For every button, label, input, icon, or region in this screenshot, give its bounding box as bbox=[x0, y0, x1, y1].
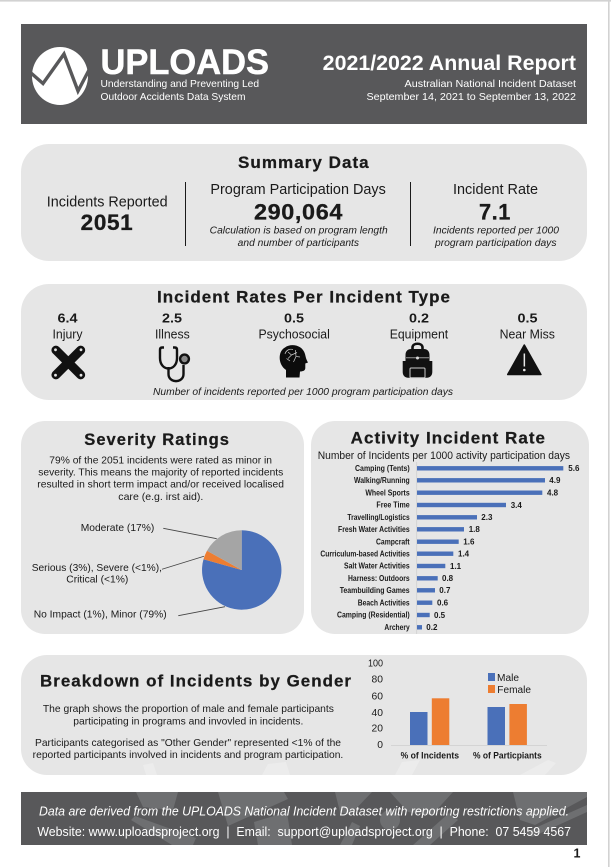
text: gender description: The graph shows the proportion of male and female participants bbox=[43, 704, 334, 715]
bar chart: activity rates: Fresh Water Activities bbox=[338, 525, 410, 534]
stat: equipment: 0.2 bbox=[409, 311, 429, 326]
icon: stethoscope bbox=[160, 348, 189, 381]
chart category labels bbox=[401, 751, 542, 761]
stat: program participation days: and number of participants bbox=[238, 238, 359, 249]
pie label: serious, severe, critical: Critical (<1%) bbox=[66, 575, 128, 586]
pie label: no impact, minor: No Impact (1%), Minor (79%) bbox=[34, 610, 167, 621]
bar chart: activity rates: 0.6 bbox=[437, 598, 449, 608]
chart y axis: 60 bbox=[372, 691, 383, 702]
chart y axis: 40 bbox=[372, 708, 383, 719]
stat: incidents reported: Incidents Reported bbox=[47, 195, 168, 211]
report title bbox=[323, 52, 576, 103]
bar chart: activity rates: Curriculum-based Activities bbox=[320, 549, 410, 558]
text: severity description: 79% of the 2051 incidents were rated as minor in bbox=[49, 455, 272, 466]
logo wordmark: Understanding and Preventing Led bbox=[100, 79, 259, 90]
text: gender description bbox=[33, 704, 343, 761]
text: severity description: care (e.g. irst aid). bbox=[118, 492, 203, 503]
panel: breakdown of incidents by gender bbox=[21, 655, 587, 775]
bar chart: activity rates: 4.9 bbox=[549, 476, 561, 485]
chart legend: Female bbox=[497, 685, 531, 696]
chart y axis bbox=[368, 659, 383, 751]
stat: psychosocial: 0.5 bbox=[284, 311, 304, 326]
chart category labels: % of Particpiants bbox=[473, 751, 542, 761]
bar chart: activity rates: Beach Activities bbox=[358, 598, 410, 607]
header banner bbox=[21, 24, 587, 124]
text: gender description: participating in programs and invovled in incidents. bbox=[73, 717, 303, 728]
chart bars bbox=[410, 698, 527, 745]
caption: incident rates: Number of incidents reported per 1000 program participation days bbox=[153, 387, 453, 398]
bar chart: activity rates: Teambuilding Games bbox=[340, 586, 410, 595]
stat: injury: Injury bbox=[52, 327, 83, 341]
icon: backpack bbox=[403, 344, 432, 378]
stat: program participation days: Program Participation Days bbox=[210, 182, 386, 198]
logo wordmark bbox=[100, 43, 269, 103]
chart legend: Male bbox=[497, 673, 519, 684]
panel: incident rates per incident type bbox=[21, 284, 587, 400]
icon: warning triangle bbox=[508, 345, 541, 374]
pie chart: severity bbox=[32, 523, 281, 621]
pie label: moderate bbox=[81, 523, 217, 539]
report title: 2021/2022 Annual Report bbox=[323, 52, 576, 75]
bar chart: activity rates: 0.2 bbox=[426, 623, 438, 632]
bar chart: activity rates: Walking/Running bbox=[354, 476, 410, 485]
stat: illness: 2.5 bbox=[162, 311, 182, 326]
column chart: gender bbox=[368, 659, 547, 761]
chart category labels: % of Incidents bbox=[401, 751, 459, 761]
bar chart: activity rates: 4.8 bbox=[547, 488, 559, 498]
bar chart: activity rates bbox=[320, 462, 580, 634]
chart y axis: 0 bbox=[377, 740, 383, 751]
pie label: no impact, minor bbox=[34, 607, 225, 621]
stat: incidents reported: 2051 bbox=[81, 210, 133, 235]
bar chart: activity rates: Archery bbox=[384, 623, 410, 632]
bar chart: activity rates: 5.6 bbox=[568, 464, 580, 473]
bar chart: activity rates: 2.3 bbox=[481, 513, 493, 522]
heading: activity incident rate: Activity Incident Rate bbox=[351, 429, 546, 447]
bar chart: activity rates: Harness: Outdoors bbox=[348, 574, 410, 583]
pie label: moderate: Moderate (17%) bbox=[81, 523, 154, 534]
pie label: serious, severe, critical: Serious (3%), Severe (<1%), bbox=[32, 563, 162, 574]
stat: psychosocial bbox=[258, 311, 330, 341]
stat: equipment: Equipment bbox=[390, 327, 449, 341]
chart y axis: 20 bbox=[372, 724, 383, 735]
stat: incidents reported bbox=[47, 195, 168, 235]
bar chart: activity rates: Camping (Tents) bbox=[355, 464, 410, 473]
bar chart: activity rates: 1.4 bbox=[458, 550, 470, 558]
stat: illness bbox=[155, 311, 190, 341]
heading: gender: Breakdown of Incidents by Gender bbox=[40, 673, 352, 691]
bar chart: activity rates: Travelling/Logistics bbox=[347, 513, 410, 522]
page number: 1 bbox=[574, 847, 580, 861]
bar chart: activity rates: 0.8 bbox=[442, 574, 454, 583]
bar chart: activity rates: 0.5 bbox=[434, 611, 446, 620]
bar chart: activity rates: 1.6 bbox=[463, 538, 475, 546]
stat: near miss bbox=[500, 311, 555, 341]
stat: near miss: 0.5 bbox=[518, 311, 538, 326]
stat: program participation days: 290,064 bbox=[254, 199, 343, 224]
stat: incident rate: Incidents reported per 1000 bbox=[433, 225, 559, 236]
pie label: serious, severe, critical bbox=[32, 556, 204, 586]
panel: summary data bbox=[21, 144, 587, 261]
stat: equipment bbox=[390, 311, 449, 341]
heading: summary data: Summary Data bbox=[238, 154, 370, 172]
heading: incident rates: Incident Rates Per Incident Type bbox=[157, 289, 451, 307]
icon: head with brain bbox=[280, 345, 308, 378]
text: severity description bbox=[37, 455, 284, 503]
bar chart: activity rates: Free Time bbox=[376, 501, 410, 510]
bar chart: activity rates: Salt Water Activities bbox=[344, 562, 410, 571]
panel: activity incident rate bbox=[311, 421, 589, 634]
stat: program participation days: Calculation is based on program length bbox=[210, 225, 388, 236]
bar chart: activity rates: Wheel Sports bbox=[365, 488, 410, 497]
text: gender description: reported participants involved in incidents and program participation. bbox=[33, 750, 343, 761]
stat: injury: 6.4 bbox=[58, 311, 78, 326]
chart legend bbox=[488, 673, 531, 696]
text: severity description: resulted in short term impact and/or received localised bbox=[37, 480, 284, 491]
chart y axis: 100 bbox=[368, 659, 383, 670]
text: gender description: Participants categorised as "Other Gender" represented <1% of the bbox=[35, 738, 341, 749]
stat: illness: Illness bbox=[155, 327, 190, 341]
logo wordmark: UPLOADS bbox=[100, 43, 269, 82]
report title: Australian National Incident Dataset bbox=[404, 79, 576, 90]
stat: incident rate: 7.1 bbox=[479, 199, 511, 224]
stat: incident rate bbox=[433, 182, 559, 249]
bar chart: activity rates: Camping (Residential) bbox=[337, 611, 410, 620]
stat: incident rate: program participation days bbox=[434, 238, 556, 249]
stat: program participation days bbox=[210, 182, 388, 249]
stat: near miss: Near Miss bbox=[500, 327, 555, 341]
stat: incident rate: Incident Rate bbox=[453, 182, 538, 198]
bar chart: activity rates: 1.1 bbox=[450, 562, 462, 571]
subheading: activity chart: Number of Incidents per 1000 activity participation days bbox=[318, 450, 570, 462]
heading: severity ratings: Severity Ratings bbox=[84, 431, 230, 449]
bar chart: activity rates: 3.4 bbox=[511, 501, 522, 510]
footer data note: Data are derived from the UPLOADS National Incident Dataset with reporting restrictions applied. bbox=[39, 803, 569, 818]
logo wordmark: Outdoor Accidents Data System bbox=[100, 92, 246, 103]
chart y axis: 80 bbox=[372, 675, 383, 686]
panel: severity ratings bbox=[21, 421, 304, 634]
footer contact line: Website: www.uploadsproject.org | Email: support@uploadsproject.org | Phone: 07 5459 4567 bbox=[37, 824, 571, 839]
icon: UPLOADS logo bbox=[31, 47, 89, 105]
stat: injury bbox=[52, 311, 83, 341]
bar chart: activity rates: 1.8 bbox=[469, 525, 480, 534]
bar chart: activity rates: 0.7 bbox=[439, 586, 451, 595]
text: severity description: severity. This means the majority of reported incidents bbox=[38, 468, 283, 479]
stat: psychosocial: Psychosocial bbox=[258, 327, 330, 341]
icon: crossed bandages bbox=[50, 344, 87, 381]
bar chart: activity rates: Campcraft bbox=[376, 537, 410, 546]
report title: September 14, 2021 to September 13, 2022 bbox=[366, 92, 576, 103]
footer banner bbox=[21, 792, 587, 845]
